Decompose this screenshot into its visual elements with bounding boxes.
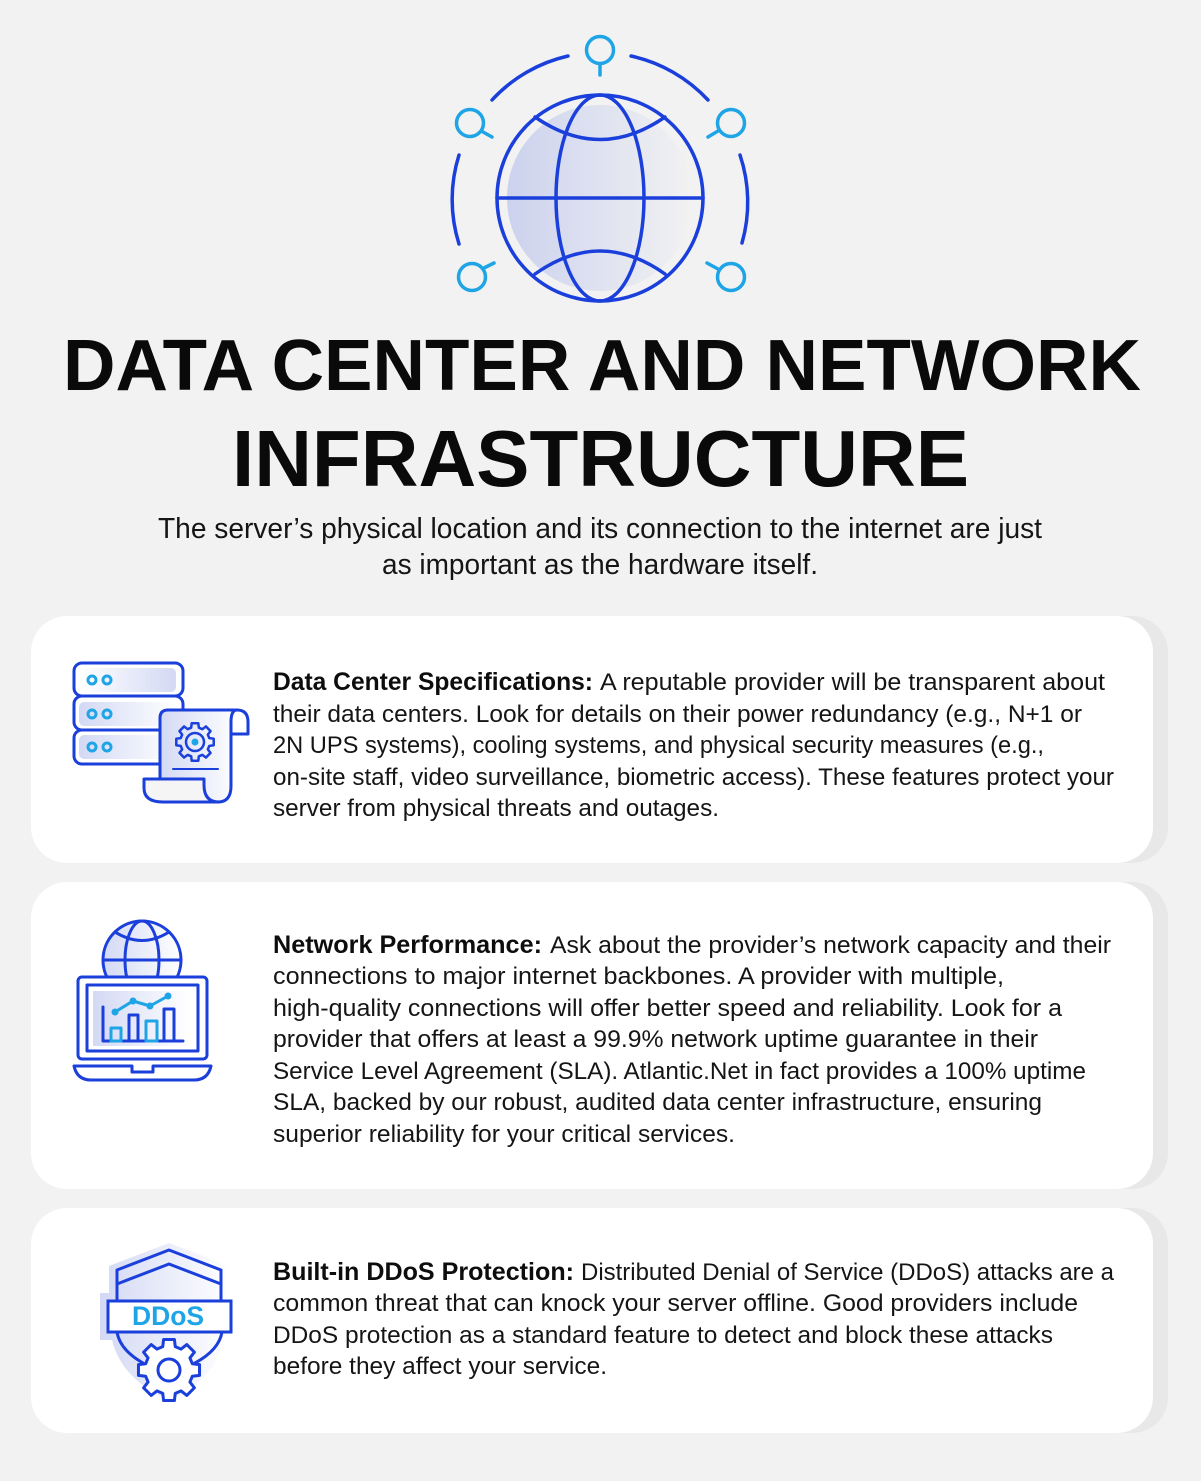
text: data center specifications: Data Center Specifications: — [273, 668, 593, 696]
text: built-in ddos protection: Built-in DDoS Protection: — [273, 1258, 574, 1286]
panel: network performance — [31, 882, 1168, 1189]
title: DATA CENTER AND NETWORK — [63, 326, 1141, 406]
icon: server stack with document — [74, 663, 248, 802]
subtitle: The server’s physical location and its connection to the internet are just — [158, 513, 1042, 545]
text: network performance: provider that offers at least a 99.9% network uptime guarantee in their — [273, 1026, 1038, 1053]
icon: globe with network nodes — [452, 36, 748, 301]
text: built-in ddos protection: DDoS protection as a standard feature to detect and block these attacks — [273, 1322, 1053, 1349]
text: network performance: SLA, backed by our robust, audited data center infrastructure, ensuring — [273, 1089, 1042, 1116]
subtitle: as important as the hardware itself. — [382, 549, 818, 581]
panel: built-in ddos protection — [31, 1208, 1168, 1433]
icon: ddos shield with gear: DDoS — [132, 1301, 204, 1331]
text: data center specifications: 2N UPS systems), cooling systems, and physical security measures (e.g., — [273, 732, 1044, 759]
text: network performance: Service Level Agreement (SLA). Atlantic.Net in fact provides a 100% uptime — [273, 1058, 1086, 1085]
title: INFRASTRUCTURE — [232, 414, 969, 503]
text: network performance: Network Performance: — [273, 931, 542, 959]
text: network performance: connections to major internet backbones. A provider with multiple, — [273, 963, 1004, 990]
subtitle — [158, 513, 1042, 581]
text: built-in ddos protection: before they affect your service. — [273, 1353, 607, 1380]
text: network performance: high-quality connections will offer better speed and reliability. Look for a — [273, 995, 1063, 1022]
icon: ddos shield with gear — [100, 1243, 231, 1401]
text: built-in ddos protection: Distributed Denial of Service (DDoS) attacks are a — [581, 1259, 1115, 1286]
text: data center specifications: on-site staff, video surveillance, biometric access). These features protect your — [273, 764, 1114, 791]
text: data center specifications — [273, 668, 1114, 822]
text: data center specifications: A reputable provider will be transparent about — [600, 669, 1105, 696]
text: data center specifications: server from physical threats and outages. — [273, 795, 719, 822]
text: network performance: Ask about the provider’s network capacity and their — [550, 932, 1111, 959]
text: network performance: superior reliability for your critical services. — [273, 1121, 735, 1148]
panel: data center specifications — [31, 616, 1168, 863]
text: data center specifications: their data centers. Look for details on their power redundancy (e.g., N+1 or — [273, 701, 1082, 728]
text: network performance — [273, 931, 1111, 1148]
text: built-in ddos protection — [273, 1258, 1115, 1380]
icon: laptop with globe and chart — [74, 921, 211, 1080]
title — [63, 326, 1141, 503]
text: built-in ddos protection: common threat that can knock your server offline. Good providers include — [273, 1290, 1078, 1317]
